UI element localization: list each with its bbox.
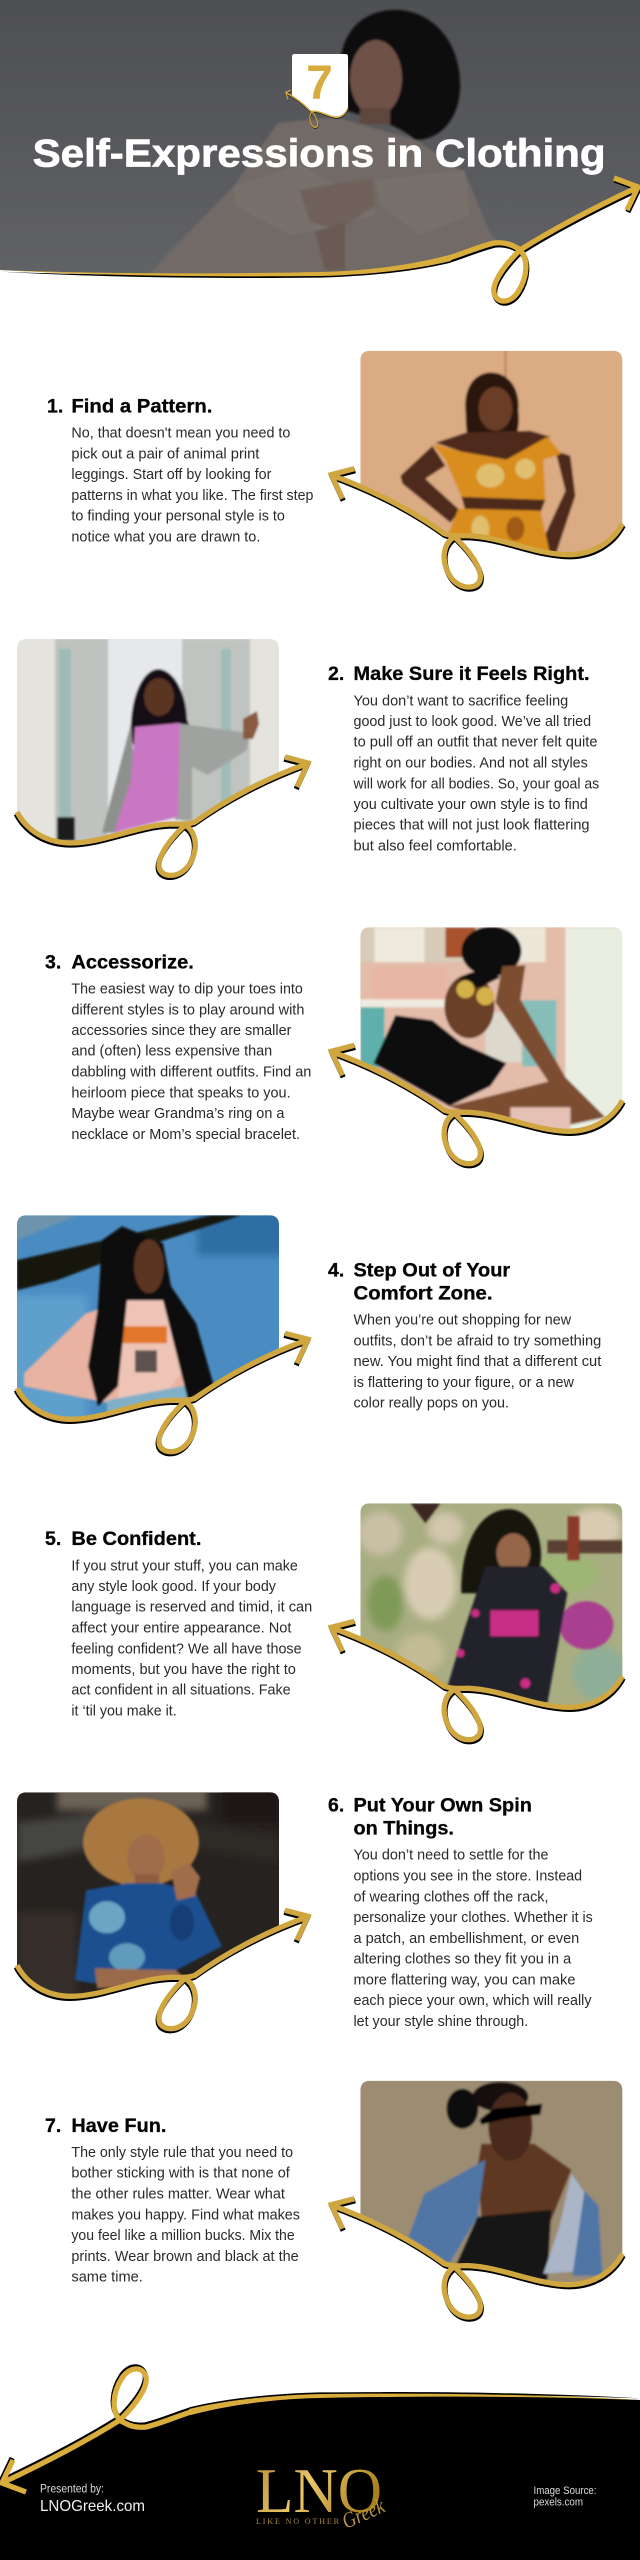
heading 6: 6.: [328, 1795, 344, 1817]
heading 2: 2.: [328, 663, 344, 685]
photo 5 with ribbon arrow: [330, 1503, 628, 1742]
logo: LNO Like No Other Greek: LNO: [256, 2455, 382, 2526]
body text 3: [71, 982, 311, 1143]
body text 3: Maybe wear Grandma’s ring on a: [71, 1106, 284, 1122]
body text 5: moments, but you have the right to: [71, 1662, 296, 1678]
heading 6: Put Your Own Spin: [354, 1795, 532, 1817]
body text 7: the other rules matter. Wear what: [71, 2187, 285, 2203]
body text 3: dabbling with different outfits. Find an: [71, 1065, 311, 1081]
footer black band: [0, 2395, 640, 2560]
section 5: Be Confident: [45, 1503, 628, 1742]
body text 3: accessories since they are smaller: [71, 1023, 292, 1039]
heading 6: [328, 1795, 532, 1839]
number badge: [286, 54, 348, 128]
heading 4: [328, 1260, 511, 1304]
body text 6: options you see in the store. Instead: [354, 1868, 582, 1884]
body text 5: [71, 1558, 312, 1720]
body text 5: feeling confident? We all have those: [71, 1641, 302, 1657]
body text 3: The easiest way to dip your toes into: [71, 982, 303, 998]
body text 6: altering clothes so they fit you in a: [354, 1952, 571, 1968]
body text 7: The only style rule that you need to: [71, 2145, 293, 2161]
ribbon arrow: header: [0, 178, 639, 303]
body text 3: heirloom piece that speaks to you.: [71, 1085, 291, 1101]
logo: LNO Like No Other Greek: LIKE NO OTHER: [256, 2517, 340, 2526]
body text 6: let your style shine through.: [354, 2014, 528, 2030]
body text 3: necklace or Mom’s special bracelet.: [71, 1127, 300, 1143]
photo 3 with ribbon arrow: [330, 922, 630, 1166]
header banner: [0, 0, 640, 303]
body text 2: [353, 693, 599, 855]
body text 3: different styles is to play around with: [71, 1002, 304, 1018]
body text 2: pieces that will not just look flattering: [354, 818, 590, 834]
heading 2: Make Sure it Feels Right.: [354, 663, 590, 685]
footer: [0, 2367, 640, 2560]
heading 5: Be Confident.: [71, 1528, 201, 1550]
body text 1: No, that doesn't mean you need to: [71, 426, 290, 442]
body text 7: [71, 2145, 300, 2286]
heading 1: Find a Pattern.: [71, 396, 212, 418]
image source: [534, 2485, 596, 2509]
body text 6: a patch, an embellishment, or even: [354, 1931, 579, 1947]
heading 5: 5.: [45, 1528, 61, 1550]
heading 4: Step Out of Your: [354, 1260, 511, 1282]
body text 1: [71, 426, 313, 545]
section 6: Put Your Own Spin on Things: [16, 1782, 593, 2031]
body text 1: patterns in what you like. The first step: [71, 488, 313, 504]
body text 1: notice what you are drawn to.: [71, 529, 260, 545]
body text 6: You don’t need to settle for the: [354, 1848, 548, 1864]
section 4: Step Out of Your Comfort Zone: [7, 1205, 601, 1454]
body text 4: is flattering to your figure, or a new: [354, 1375, 575, 1391]
image source: Image Source:: [534, 2485, 596, 2497]
section 2: Make Sure it Feels Right: [12, 634, 599, 877]
body text 6: [354, 1848, 593, 2030]
body text 7: bother sticking with is that none of: [71, 2166, 291, 2182]
photo 7 with ribbon arrow: [330, 2076, 630, 2319]
body text 6: each piece your own, which will really: [354, 1993, 592, 2009]
body text 3: and (often) less expensive than: [71, 1044, 272, 1060]
body text 2: will work for all bodies. So, your goal as: [353, 776, 599, 792]
presented by: LNOGreek.com: [40, 2498, 145, 2515]
presented by: [40, 2484, 145, 2515]
photo 4 with ribbon arrow: [7, 1205, 309, 1454]
section 3: Accessorize: [45, 922, 630, 1166]
photo 6 with ribbon arrow: [16, 1782, 309, 2031]
body text 5: affect your entire appearance. Not: [71, 1620, 291, 1636]
body text 4: [354, 1313, 601, 1412]
body text 1: to finding your personal style is to: [71, 509, 285, 525]
header photo: woman in coat on grey background: [0, 0, 640, 280]
body text 5: If you strut your stuff, you can make: [71, 1558, 298, 1574]
body text 5: act confident in all situations. Fake: [71, 1683, 291, 1699]
body text 6: more flattering way, you can make: [354, 1972, 576, 1988]
heading 3: Accessorize.: [71, 951, 194, 973]
body text 1: pick out a pair of animal print: [71, 446, 259, 462]
heading 6: on Things.: [354, 1817, 454, 1839]
heading 3: 3.: [45, 951, 61, 973]
body text 7: same time.: [71, 2270, 143, 2286]
image source: pexels.com: [534, 2497, 583, 2509]
heading 4: 4.: [328, 1260, 344, 1282]
body text 2: but also feel comfortable.: [354, 839, 517, 855]
number badge: 7: [306, 57, 333, 110]
body text 7: prints. Wear brown and black at the: [71, 2249, 299, 2265]
body text 1: leggings. Start off by looking for: [71, 467, 272, 483]
body text 4: When you’re out shopping for new: [354, 1313, 572, 1329]
body text 2: you cultivate your own style is to find: [354, 797, 588, 813]
body text 6: personalize your clothes. Whether it is: [354, 1910, 593, 1926]
ribbon arrow: footer: [1, 2367, 640, 2492]
presented by: Presented by:: [40, 2484, 104, 2496]
body text 2: right on our bodies. And not all styles: [354, 755, 588, 771]
body text 2: to pull off an outfit that never felt quite: [354, 735, 598, 751]
body text 5: language is reserved and timid, it can: [71, 1600, 312, 1616]
body text 7: you feel like a million bucks. Mix the: [71, 2228, 295, 2244]
heading 1: 1.: [47, 396, 63, 418]
section 1: Find a Pattern: [47, 346, 630, 589]
heading 7: 7.: [45, 2115, 61, 2137]
photo 2 with ribbon arrow: [12, 634, 309, 877]
body text 4: outfits, don’t be afraid to try something: [354, 1333, 601, 1349]
heading 7: Have Fun.: [71, 2115, 166, 2137]
body text 2: You don’t want to sacrifice feeling: [354, 693, 568, 709]
body text 5: it ‘til you make it.: [71, 1704, 177, 1720]
body text 7: makes you happy. Find what makes: [71, 2207, 300, 2223]
title: Self-Expressions in Clothing: [33, 133, 606, 176]
body text 4: color really pops on you.: [354, 1396, 509, 1412]
body text 4: new. You might find that a different cut: [354, 1354, 601, 1370]
heading 4: Comfort Zone.: [354, 1282, 492, 1304]
logo: LNO Like No Other Greek: Greek: [338, 2492, 389, 2534]
section 7: Have Fun: [45, 2076, 630, 2319]
photo 1 with ribbon arrow: [330, 346, 630, 589]
body text 6: of wearing clothes off the rack,: [354, 1889, 548, 1905]
body text 5: any style look good. If your body: [71, 1579, 277, 1595]
body text 2: good just to look good. We’ve all tried: [354, 714, 591, 730]
